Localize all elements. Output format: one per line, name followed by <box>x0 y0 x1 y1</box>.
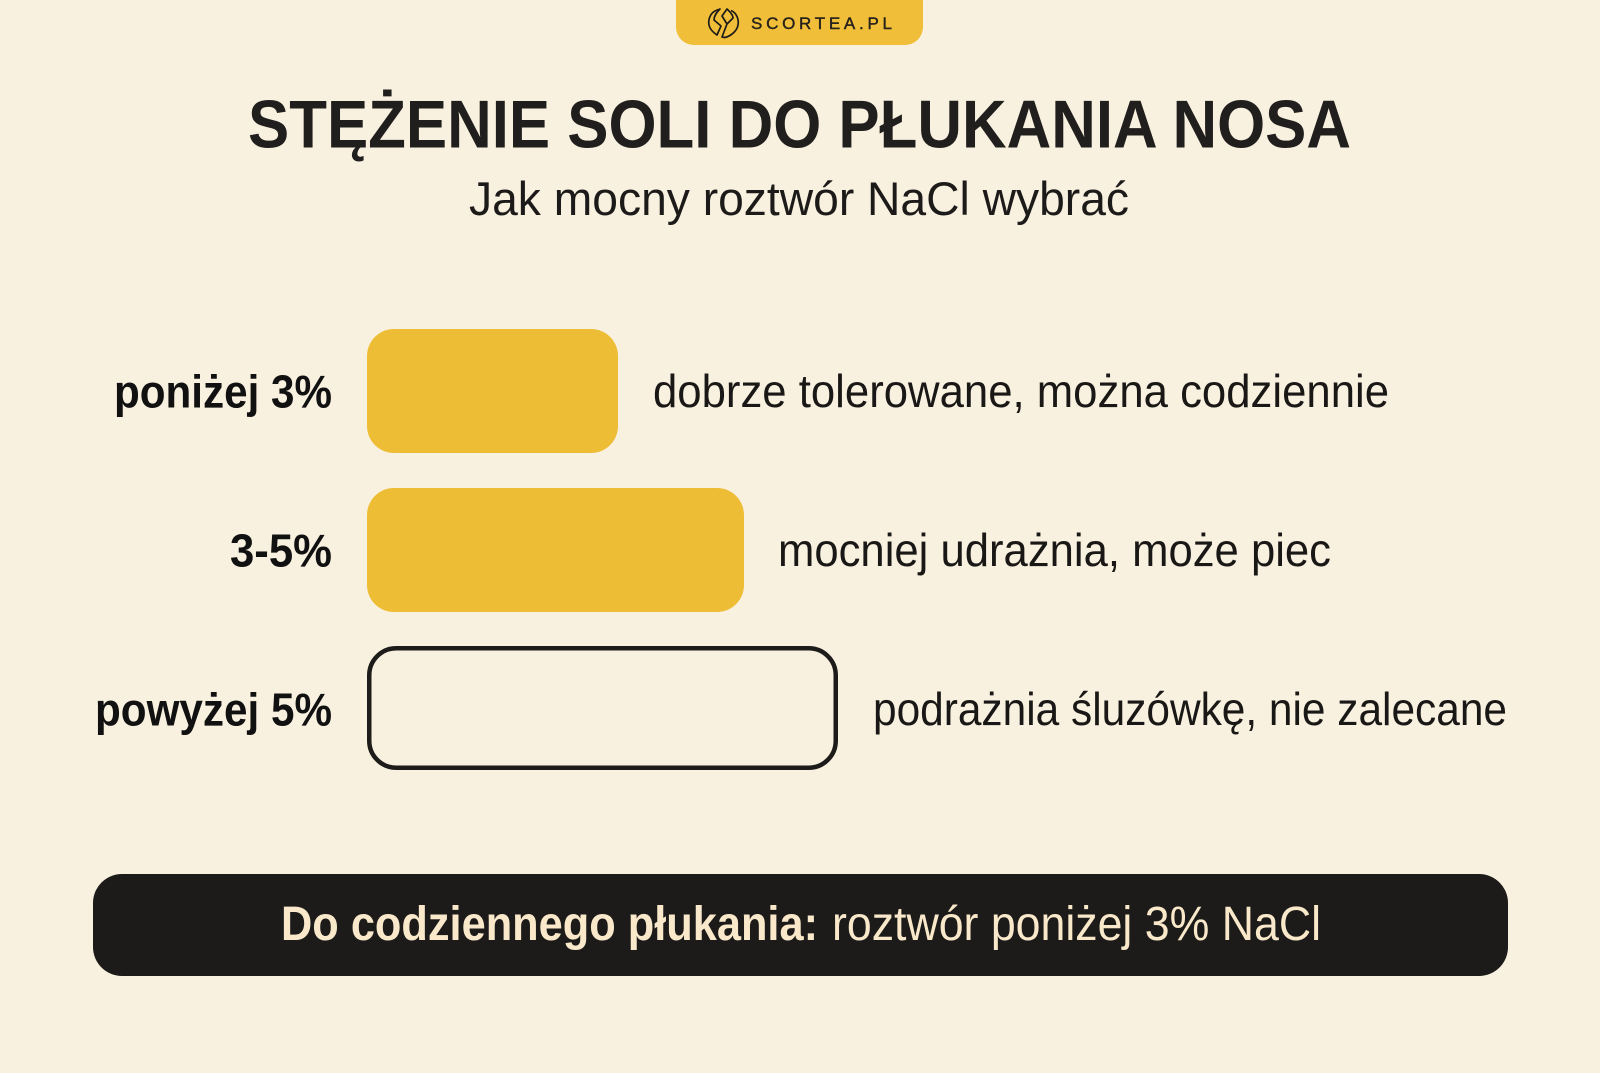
banner regular text: roztwór poniżej 3% NaCl <box>832 898 1321 951</box>
description: below 3%: dobrze tolerowane, można codziennie <box>653 365 1389 417</box>
bar: below 3% <box>367 329 618 453</box>
label: poniżej 3%: poniżej 3% <box>114 366 332 418</box>
brand tab: SCORTEA.PL <box>676 0 923 45</box>
description: 3-5%: mocniej udrażnia, może piec <box>778 524 1331 576</box>
description: above 5%: podrażnia śluzówkę, nie zalecane <box>873 683 1507 735</box>
brand name: SCORTEA.PL <box>751 14 892 33</box>
label: 3-5%: 3-5% <box>230 524 332 576</box>
row: above 5% <box>95 648 1507 768</box>
title: STĘŻENIE SOLI DO PŁUKANIA NOSA <box>248 86 1351 162</box>
bar: 3-5% <box>367 488 744 612</box>
banner bold text: Do codziennego płukania: <box>281 898 818 951</box>
recommendation banner <box>93 874 1508 976</box>
label: powyżej 5%: powyżej 5% <box>95 684 332 736</box>
row: 3-5% <box>230 488 1331 612</box>
icon: scortea logo <box>709 9 738 38</box>
row: below 3% <box>114 329 1389 453</box>
subtitle: Jak mocny roztwór NaCl wybrać <box>469 172 1129 225</box>
bar: above 5% outline <box>369 648 836 768</box>
